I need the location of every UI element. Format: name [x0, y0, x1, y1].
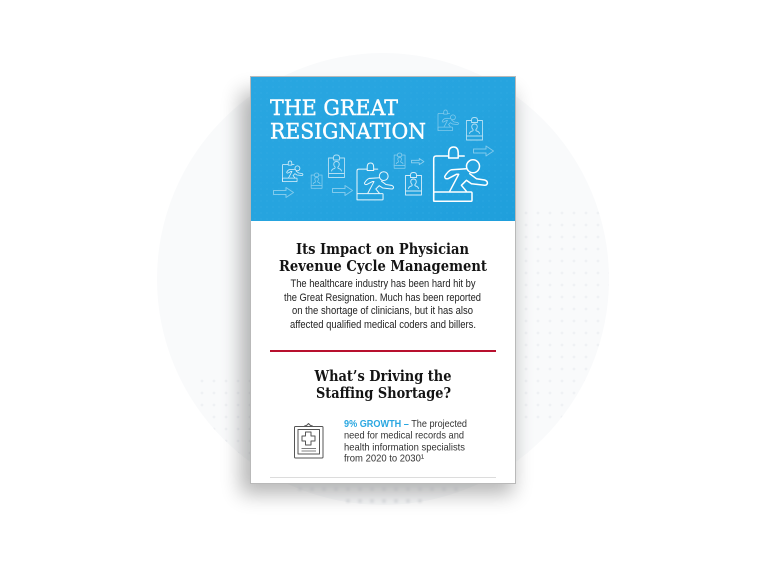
- card shadow: [241, 92, 513, 503]
- arrow: [274, 188, 294, 198]
- dotted pattern: [201, 212, 599, 452]
- intro paragraph: [284, 278, 481, 331]
- red divider: [270, 350, 496, 352]
- background circle: [200, 212, 609, 454]
- intro paragraph: on the shortage of clinicians, but it has also: [292, 305, 473, 317]
- intro paragraph: the Great Resignation. Much has been reported: [284, 292, 481, 304]
- icon: medium runner exiting: [357, 163, 394, 200]
- infographic card: [250, 76, 516, 484]
- title: [270, 96, 426, 144]
- arrow: [412, 158, 424, 165]
- heading: staffing shortage: Staffing Shortage?: [316, 384, 451, 402]
- icon: small runner exiting: [282, 161, 303, 182]
- heading: impact: [279, 240, 487, 275]
- title: THE GREAT: [270, 96, 398, 120]
- growth statistic: [344, 418, 467, 464]
- icon: badge: [406, 172, 422, 195]
- light divider: [270, 477, 496, 478]
- icon: large runner exiting: [434, 147, 487, 201]
- growth statistic: need for medical records and: [344, 430, 464, 442]
- growth statistic: health information specialists: [344, 442, 465, 454]
- icon: faded runner exiting: [438, 110, 458, 131]
- arrow: [332, 186, 352, 196]
- icon: badge: [466, 118, 482, 140]
- intro paragraph: affected qualified medical coders and billers.: [290, 319, 476, 331]
- heading: impact: Its Impact on Physician: [296, 240, 469, 258]
- icon: small badge: [394, 153, 405, 168]
- title: RESIGNATION: [270, 120, 426, 144]
- heading: staffing shortage: What’s Driving the: [314, 367, 452, 385]
- growth statistic: 9% GROWTH – The projected: [344, 418, 467, 430]
- growth statistic: from 2020 to 2030¹: [344, 452, 424, 464]
- intro paragraph: The healthcare industry has been hard hit by: [290, 278, 476, 290]
- icon: medical clipboard: [294, 424, 323, 458]
- arrow: [474, 146, 494, 156]
- heading: staffing shortage: [314, 367, 452, 402]
- header banner: [251, 77, 515, 221]
- heading: impact: Revenue Cycle Management: [279, 257, 487, 275]
- icon: small badge: [311, 173, 322, 188]
- icon: badge: [328, 155, 344, 178]
